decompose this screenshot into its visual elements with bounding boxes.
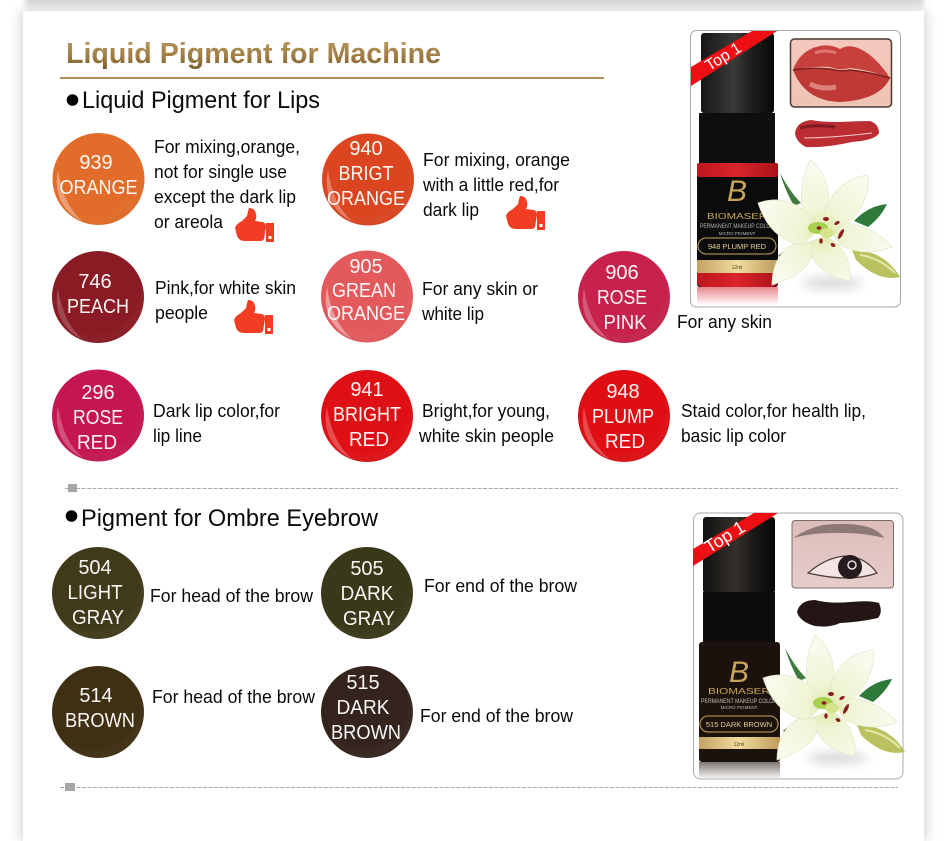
bottle: dark brown: 515 DARK BROWN <box>706 720 772 729</box>
swatch: 296 rose red: 296 <box>81 382 115 404</box>
description: 906: For any skin <box>677 312 772 332</box>
swatch: 940 brigt orange: 940 <box>349 138 383 160</box>
bottle: dark brown: B <box>729 656 749 689</box>
swatch: 746 peach: 746 <box>78 271 112 293</box>
description: 746: people <box>155 303 208 323</box>
swatch: 906 rose pink: 906 <box>605 262 639 284</box>
bottle: plump red <box>697 33 778 305</box>
swatch: 948 plump red: 948 <box>606 381 640 403</box>
swatch: 940 brigt orange: BRIGT <box>338 163 394 185</box>
swatch: 948 plump red <box>578 370 670 462</box>
swatch: 941 bright red <box>321 370 413 462</box>
description: 939: For mixing,orange, <box>154 137 300 157</box>
bottle: dark brown: MICRO PIGMENT <box>721 705 758 710</box>
swatch: 515 dark brown: BROWN <box>331 722 401 744</box>
bottle: dark brown: BIOMASER <box>708 686 770 696</box>
swatch: 948 plump red: PLUMP <box>592 406 654 428</box>
panel: dark brown product photo <box>693 513 905 779</box>
bottle: dark brown: PERMANENT MAKEUP COLOR <box>701 699 778 705</box>
swatch: 905 grean orange: 905 <box>349 256 383 278</box>
swatch: 906 rose pink: PINK <box>604 312 647 334</box>
ribbon: top 1 <box>691 31 777 86</box>
swatch: 746 peach <box>52 251 144 343</box>
photo: lips <box>790 39 892 107</box>
swatch: 939 orange: 939 <box>79 152 113 174</box>
icon: lily flower <box>763 635 905 764</box>
bottle: plump red: B <box>727 175 747 208</box>
swatch: 504 light gray: GRAY <box>72 607 124 629</box>
description: 905: For any skin or <box>422 279 538 299</box>
swatch: 905 grean orange: GREAN <box>332 280 396 302</box>
ribbon: top 1: Top 1 <box>701 517 749 557</box>
swatch: 505 dark gray: 505 <box>350 558 384 580</box>
swatch: 906 rose pink <box>578 251 670 343</box>
description: 515: For end of the brow <box>420 706 574 726</box>
swatch: 504 light gray <box>52 547 144 639</box>
description: 296: Dark lip color,for <box>153 401 280 421</box>
description: 514: For head of the brow <box>152 687 316 707</box>
divider <box>60 783 898 791</box>
top shadow band <box>28 0 921 3</box>
icon: lily flower <box>758 160 900 289</box>
swatch: 941 bright red: RED <box>349 429 389 451</box>
swatch: 504 light gray: LIGHT <box>68 582 122 604</box>
swatch: 514 brown <box>52 666 144 758</box>
swatch: 515 dark brown <box>321 666 413 758</box>
swatch: 746 peach: PEACH <box>67 296 129 318</box>
swatch: 941 bright red: 941 <box>350 379 384 401</box>
description: 504: For head of the brow <box>150 586 314 606</box>
swatch: brow colour smear <box>797 600 881 627</box>
description: 296: lip line <box>153 426 202 446</box>
swatch: 939 orange: ORANGE <box>60 177 138 199</box>
swatch: 939 orange <box>52 133 144 225</box>
bottle: dark brown <box>699 517 780 778</box>
swatch: 906 rose pink: ROSE <box>597 287 647 309</box>
description: 939: except the dark lip <box>154 187 296 207</box>
swatch: 515 dark brown: 515 <box>346 672 380 694</box>
swatch: 296 rose red: ROSE <box>73 407 123 429</box>
swatch: 505 dark gray: GRAY <box>343 608 395 630</box>
description: 948: Staid color,for health lip, <box>681 401 866 421</box>
swatch: 505 dark gray: DARK <box>340 583 394 605</box>
swatch: 905 grean orange: ORANGE <box>327 303 405 325</box>
swatch: 514 brown: 514 <box>79 685 113 707</box>
bottle: plump red: 948 PLUMP RED <box>708 242 767 251</box>
ribbon: top 1: Top 1 <box>703 40 745 75</box>
swatch: 940 brigt orange <box>322 134 414 226</box>
description: 941: white skin people <box>418 426 554 446</box>
bottle: plump red: PERMANENT MAKEUP COLOR <box>700 224 775 230</box>
swatch: lip colour smear <box>795 120 879 147</box>
description: 746: Pink,for white skin <box>155 278 296 298</box>
description: 939: not for single use <box>154 162 287 182</box>
description: 940: with a little red,for <box>422 175 559 195</box>
bottle: plump red: 12ml <box>732 265 742 271</box>
swatch: 504 light gray: 504 <box>78 557 112 579</box>
swatch: 515 dark brown: DARK <box>336 697 390 719</box>
heading: lips: Liquid Pigment for Lips <box>82 87 320 114</box>
photo: eye and brow <box>792 520 894 588</box>
title: Liquid Pigment for Machine <box>66 38 441 70</box>
heading: ombre eyebrow: Pigment for Ombre Eyebrow <box>81 505 379 532</box>
swatch: 940 brigt orange: ORANGE <box>327 188 405 210</box>
icon: thumbs up <box>235 208 274 242</box>
bottle: plump red: BIOMASER <box>707 211 767 221</box>
swatch: 514 brown: BROWN <box>65 710 135 732</box>
icon: thumbs up <box>234 300 273 334</box>
panel: plump red product photo <box>690 30 900 307</box>
swatch: 296 rose red: RED <box>77 432 117 454</box>
swatch: 296 rose red <box>52 370 144 462</box>
description: 948: basic lip color <box>681 426 786 446</box>
description: 939: or areola <box>154 212 224 232</box>
ribbon: top 1 <box>693 513 778 566</box>
swatch: 941 bright red: BRIGHT <box>333 404 401 426</box>
description: 941: Bright,for young, <box>422 401 550 421</box>
divider <box>65 484 898 492</box>
swatch: 948 plump red: RED <box>605 431 645 453</box>
bottle: plump red: MICRO PIGMENT <box>719 231 756 236</box>
bottle: dark brown: 12ml <box>734 742 744 748</box>
description: 940: dark lip <box>423 200 479 220</box>
description: 505: For end of the brow <box>424 576 578 596</box>
description: 940: For mixing, orange <box>423 150 570 170</box>
icon: thumbs up <box>506 196 545 230</box>
swatch: 505 dark gray <box>321 547 413 639</box>
description: 905: white lip <box>421 304 484 324</box>
swatch: 905 grean orange <box>321 250 413 342</box>
